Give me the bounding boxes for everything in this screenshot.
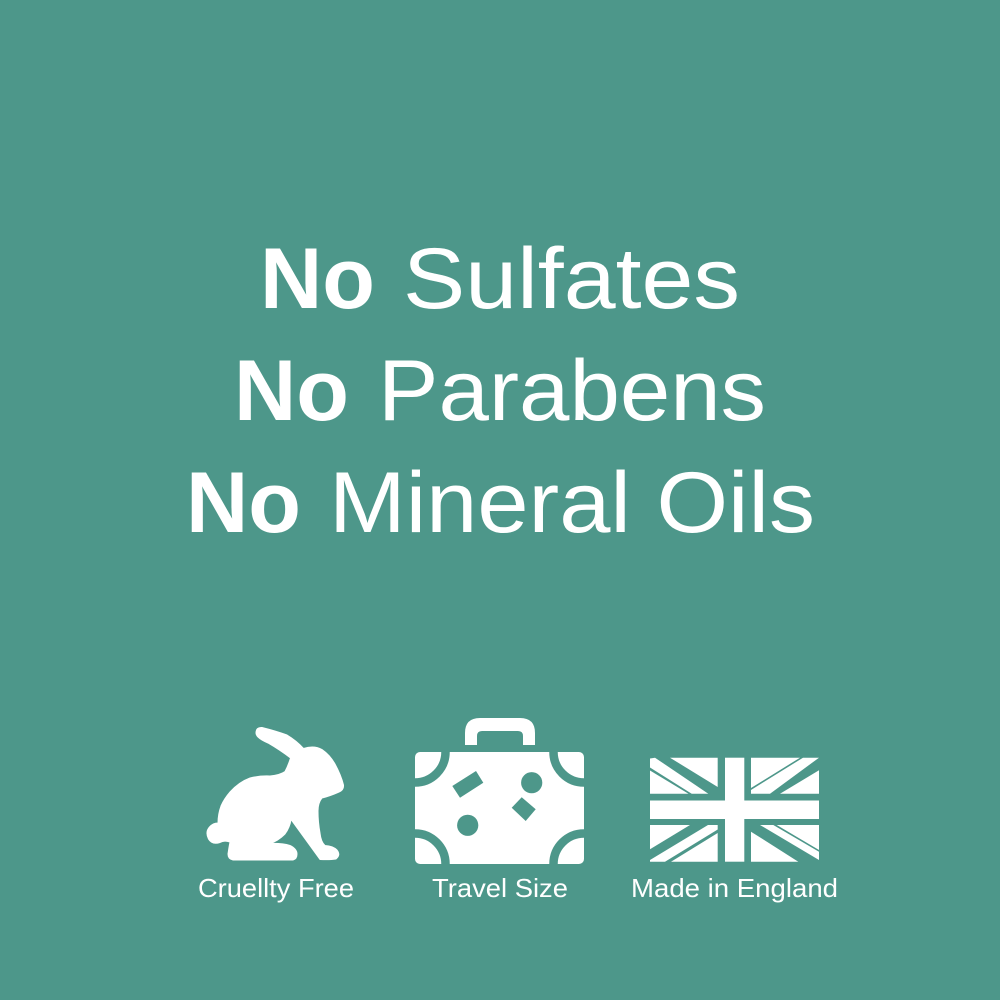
suitcase body (415, 752, 584, 864)
headline line: No Mineral Oils: No (186, 455, 301, 551)
headline line: No Sulfates: Sulfates (403, 231, 740, 327)
headline (186, 231, 815, 551)
headline line: No Parabens: Parabens (378, 343, 766, 439)
label: Made in England: Made in England (631, 873, 838, 903)
suitcase stickers (452, 771, 542, 836)
headline line: No Sulfates: No (260, 231, 375, 327)
icon: union flag (650, 758, 819, 862)
headline line: No Sulfates (260, 231, 740, 327)
headline line: No Mineral Oils: Mineral Oils (329, 455, 815, 551)
icon: rabbit (207, 727, 344, 860)
headline line: No Parabens (234, 343, 766, 439)
headline line: No Parabens: No (234, 343, 349, 439)
label: Travel Size: Travel Size (432, 873, 568, 903)
label: Cruellty Free: Cruellty Free (198, 873, 354, 903)
suitcase handle (465, 718, 535, 745)
suitcase corner straps (415, 752, 584, 864)
icon: suitcase (415, 718, 584, 864)
